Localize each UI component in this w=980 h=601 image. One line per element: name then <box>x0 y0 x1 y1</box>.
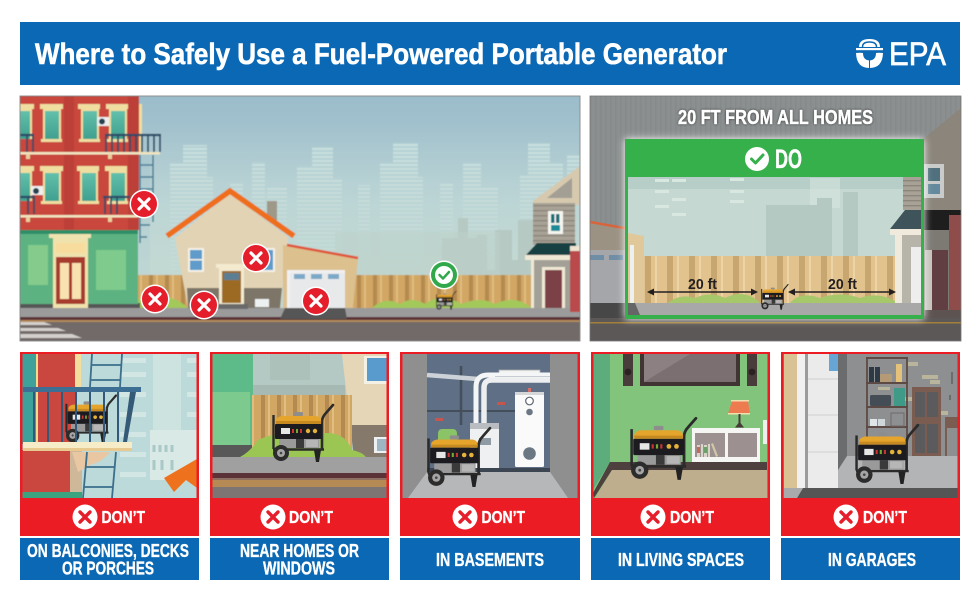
DON'T label <box>72 504 145 530</box>
left distance label: 20 ft <box>688 276 717 293</box>
DON'T label: DON’T <box>482 507 525 527</box>
storage shelves <box>866 358 908 452</box>
generator at safe distance <box>761 285 788 310</box>
unsafe marker: window <box>242 244 270 272</box>
panel: near homes or windows <box>210 352 389 536</box>
hedge <box>668 294 898 303</box>
panel: in garages <box>781 352 960 536</box>
unsafe marker: garage <box>302 286 330 316</box>
caption: homes <box>210 538 389 580</box>
panel: 20 feet from all homes <box>590 96 961 341</box>
cabinet <box>912 387 958 456</box>
DON'T label: DON’T <box>863 507 907 527</box>
generator on balcony <box>66 396 116 443</box>
road and sidewalk <box>20 303 580 341</box>
basement illustration <box>402 354 578 498</box>
dimmed neighbouring buildings <box>590 108 961 341</box>
neighbouring house on the right <box>525 166 580 312</box>
fence <box>644 256 898 303</box>
red brick apartment building <box>20 96 161 308</box>
safe small generator <box>436 291 456 310</box>
caption: garages: IN GARAGES <box>828 549 916 570</box>
DON'T label <box>452 504 525 530</box>
caption: homes: NEAR HOMES OR <box>240 540 359 561</box>
garage <box>280 245 358 319</box>
safe marker <box>430 260 458 290</box>
unsafe marker: near fence <box>140 284 170 314</box>
scene outline <box>20 96 580 341</box>
apartment door <box>49 234 91 308</box>
heading: 20 ft from all homes: 20 FT FROM ALL HOMES <box>678 106 873 129</box>
caption: basements: IN BASEMENTS <box>436 549 544 570</box>
city skyline <box>169 143 580 276</box>
caption: balconies: ON BALCONIES, DECKS <box>27 540 189 561</box>
EPA logo <box>856 35 946 72</box>
DON'T label: DON’T <box>289 507 333 527</box>
white glow around box <box>625 139 924 319</box>
green DO box <box>625 139 924 319</box>
right distance label: 20 ft <box>828 276 857 293</box>
safe zone illustration <box>628 177 921 315</box>
EPA logo: EPA <box>889 35 946 72</box>
generator near fence <box>273 405 333 462</box>
DON'T label <box>640 504 714 530</box>
header banner <box>20 22 960 85</box>
caption: living spaces: IN LIVING SPACES <box>618 549 744 570</box>
panel: in basements <box>400 352 580 536</box>
near-home illustration <box>212 354 387 498</box>
fences <box>132 275 534 308</box>
hedges <box>137 297 532 308</box>
garage illustration <box>783 354 958 498</box>
panel: on balconies <box>20 352 199 536</box>
DON'T label <box>834 504 907 530</box>
caption: garages <box>781 538 960 580</box>
unsafe marker: balcony <box>130 190 158 218</box>
left distance arrow <box>647 288 758 296</box>
generator in basement <box>428 428 490 487</box>
title: Where to Safely Use a Fuel-Powered Portable Generator <box>35 38 727 71</box>
house with orange roof <box>167 191 294 309</box>
caption: homes: WINDOWS <box>263 558 335 578</box>
living room illustration <box>593 354 768 498</box>
DO icon <box>745 147 769 171</box>
caption: balconies <box>20 538 199 580</box>
generator in garage <box>856 425 918 484</box>
DO label: DO <box>775 144 802 174</box>
unsafe marker: doorway <box>190 290 218 320</box>
caption: balconies: OR PORCHES <box>62 558 154 578</box>
caption: living spaces <box>591 538 770 580</box>
DON'T label <box>260 504 333 530</box>
caption: basements <box>400 538 580 580</box>
generator in living room <box>631 418 696 480</box>
panel: in living spaces <box>591 352 770 536</box>
panel: street scene with safe and unsafe locations <box>20 96 580 341</box>
balcony illustration <box>22 354 197 498</box>
right distance arrow <box>788 288 896 296</box>
balcony railing <box>23 390 141 451</box>
DON'T label: DON’T <box>670 507 714 527</box>
DON'T label: DON’T <box>102 507 145 527</box>
